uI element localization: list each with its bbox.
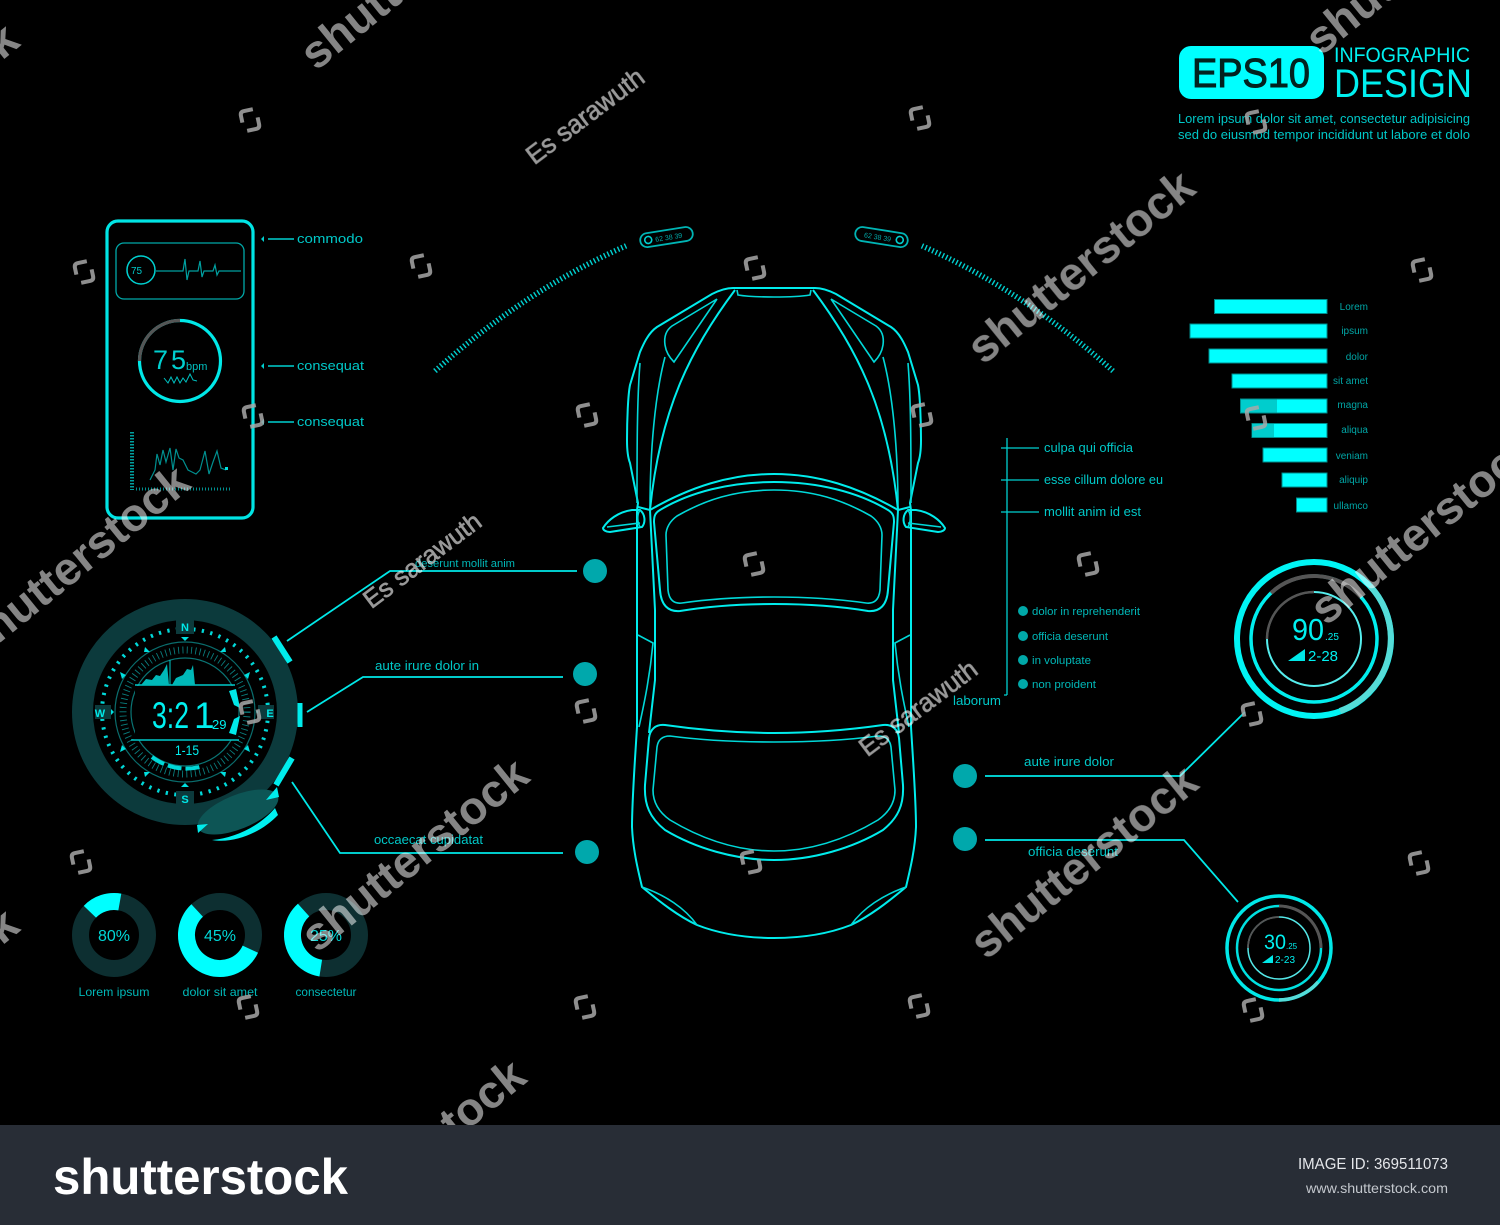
radial gauge: large: 2-28 [1308, 648, 1338, 665]
callouts: phone labels: consequat [297, 358, 364, 373]
callouts: left connectors: occaecat cupidatat [374, 832, 483, 847]
list: right bracket labels: in voluptate [1032, 655, 1091, 667]
donut chart: 45%: dolor sit amet [182, 985, 258, 999]
compass watch: 1 [194, 695, 215, 736]
radial gauge: large: .25 [1325, 632, 1339, 643]
callouts: right connectors: aute irure dolor [1024, 754, 1115, 769]
callouts: right connectors [953, 712, 1245, 902]
radial gauge: large: 90 [1292, 612, 1324, 647]
bar chart: Lorem [1340, 302, 1368, 313]
header: EPS10 infographic design: EPS10 [1192, 50, 1310, 96]
footer bar: IMAGE ID: 369511073 [1298, 1156, 1448, 1173]
list: right bracket labels: laborum [953, 693, 1001, 708]
callouts: right connectors: officia deserunt [1028, 844, 1118, 859]
list: right bracket labels: mollit anim id est [1044, 504, 1141, 519]
arc gauge: right [854, 226, 1113, 371]
footer bar: www.shutterstock.com [1305, 1180, 1448, 1196]
bar chart [1190, 300, 1369, 512]
compass watch: N [181, 622, 189, 634]
donut chart: 45% [175, 890, 265, 999]
bar chart: veniam [1336, 451, 1368, 462]
header: EPS10 infographic design: sed do eiusmod tempor incididunt ut labore et dolo [1178, 127, 1470, 142]
list: right bracket labels: culpa qui officia [1044, 440, 1134, 455]
list: right bracket labels: dolor in reprehenderit [1032, 606, 1140, 618]
compass watch: E [266, 708, 274, 720]
list: right bracket labels: esse cillum dolore eu [1044, 472, 1163, 487]
list: right bracket labels: non proident [1032, 679, 1096, 691]
arc gauge: right: 62 38 39 [863, 232, 892, 244]
header: EPS10 infographic design: DESIGN [1334, 62, 1472, 106]
compass watch: 29 [212, 717, 226, 732]
radial gauge: large [1237, 562, 1391, 716]
watermark: diagonal text: Es sarawuth [521, 63, 650, 170]
bar chart: ullamco [1334, 501, 1368, 512]
arc gauge: left [435, 226, 694, 371]
donut chart: 45%: 45% [204, 928, 236, 945]
watermark: diagonal text: Es sarawuth [358, 507, 487, 614]
bar chart: magna [1337, 400, 1368, 411]
compass watch: W [95, 708, 106, 720]
bar chart: aliqua [1341, 425, 1368, 436]
donut chart: 80%: Lorem ipsum [78, 985, 150, 999]
radial gauge: small: 2-23 [1275, 955, 1295, 966]
radial gauge: small [1227, 896, 1331, 1000]
header: EPS10 infographic design: Lorem ipsum dolor sit amet, consectetur adipisicing [1178, 111, 1470, 126]
bar chart: sit amet [1333, 376, 1368, 387]
car top view outline [603, 288, 945, 938]
callouts: left connectors: aute irure dolor in [375, 658, 479, 673]
donut chart: 25% [288, 897, 364, 999]
donut chart: 25%: 25% [310, 928, 342, 945]
bar chart: ipsum [1341, 326, 1368, 337]
watermark: diagonal text: Es sarawuth [854, 655, 983, 762]
watermark: diagonal text: shutterstock [291, 747, 538, 961]
panel: phone heart rate: 75 [153, 345, 189, 375]
callouts: phone labels: commodo [297, 231, 363, 246]
compass watch [72, 599, 300, 844]
donut chart: 25%: consectetur [296, 985, 356, 999]
donut chart: 80%: 80% [98, 928, 130, 945]
watermark: diagonal text: shutterstock [960, 754, 1207, 968]
list: right bracket labels: officia deserunt [1032, 631, 1108, 643]
watermark: diagonal text: shutterstock [957, 159, 1204, 373]
callouts: phone labels: consequat [297, 414, 364, 429]
list: right bracket labels [953, 438, 1163, 708]
header: EPS10 infographic design [1178, 44, 1472, 142]
watermark: small logo marks [71, 107, 1432, 1021]
footer bar: shutterstock [53, 1149, 348, 1205]
header: EPS10 infographic design: INFOGRAPHIC [1334, 44, 1470, 67]
bar chart: dolor [1346, 352, 1369, 363]
radial gauge: small: .25 [1286, 942, 1298, 951]
donut chart: 80% [67, 888, 161, 999]
panel: phone heart rate: 75 [131, 266, 143, 277]
callouts: left connectors: deserunt mollit anim [415, 558, 515, 570]
bar chart: aliquip [1339, 475, 1368, 486]
compass watch: 3:2 [152, 695, 189, 736]
panel: phone heart rate: bpm [186, 361, 207, 373]
radial gauge: small: 30 [1264, 931, 1286, 954]
footer bar [0, 1125, 1500, 1225]
arc gauge: left: 62 38 39 [655, 233, 683, 244]
callouts: left connectors [287, 558, 607, 864]
compass watch: 1-15 [175, 742, 199, 758]
panel: phone heart rate [107, 221, 253, 518]
compass watch: S [181, 794, 189, 806]
callouts: phone labels [261, 231, 364, 429]
